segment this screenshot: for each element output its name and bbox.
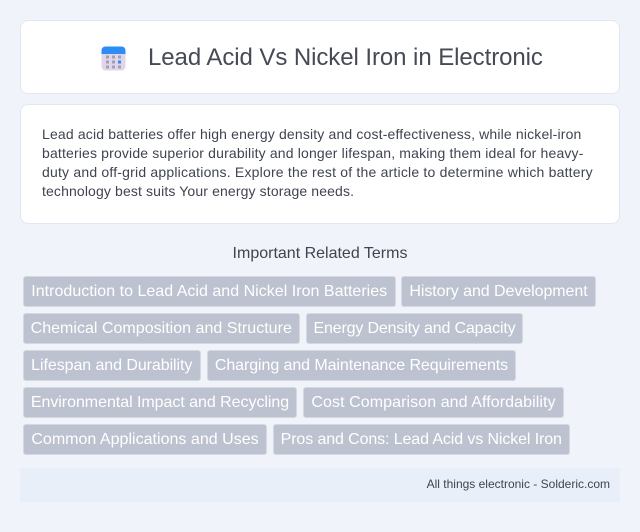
tag: charging — [207, 350, 516, 381]
title: Lead Acid Vs Nickel Iron in Electronic — [148, 44, 543, 71]
tag: cost: Cost Comparison and Affordability — [311, 394, 556, 411]
tag: pros and cons: Pros and Cons: Lead Acid vs Nickel Iron — [281, 431, 562, 448]
tag: lifespan: Lifespan and Durability — [31, 357, 192, 374]
tag: energy: Energy Density and Capacity — [313, 320, 516, 337]
tag: chemical: Chemical Composition and Structure — [31, 320, 292, 337]
tag: chemical — [23, 313, 300, 344]
tag: history: History and Development — [409, 283, 588, 300]
tag: history — [401, 276, 596, 307]
intro text: batteries provide superior durability and longer lifespan, making them ideal for heavy- — [42, 145, 584, 161]
tag: introduction: Introduction to Lead Acid and Nickel Iron Batteries — [31, 283, 387, 300]
tag: applications: Common Applications and Uses — [31, 431, 259, 448]
tag: energy — [306, 313, 523, 344]
header card — [20, 20, 620, 94]
tag: environmental — [23, 387, 297, 418]
tag: cost — [303, 387, 564, 418]
footer text: All things electronic - Solderic.com — [427, 477, 610, 491]
tag: lifespan — [23, 350, 200, 381]
intro text: technology best suits Your energy storage needs. — [42, 183, 354, 199]
tag: charging: Charging and Maintenance Requirements — [215, 357, 508, 374]
tag: applications — [23, 424, 267, 455]
intro text: duty and off-grid applications. Explore the rest of the article to determine which battery — [42, 164, 593, 180]
icon: calendar — [102, 46, 126, 70]
tag: introduction — [23, 276, 396, 307]
related terms heading: Important Related Terms — [233, 245, 407, 262]
tag: pros and cons — [273, 424, 570, 455]
intro panel — [20, 104, 620, 224]
footer bar — [20, 468, 620, 502]
intro text — [42, 126, 593, 199]
tag: environmental: Environmental Impact and Recycling — [31, 394, 289, 411]
intro text: Lead acid batteries offer high energy density and cost-effectiveness, while nickel-iron — [42, 126, 581, 142]
